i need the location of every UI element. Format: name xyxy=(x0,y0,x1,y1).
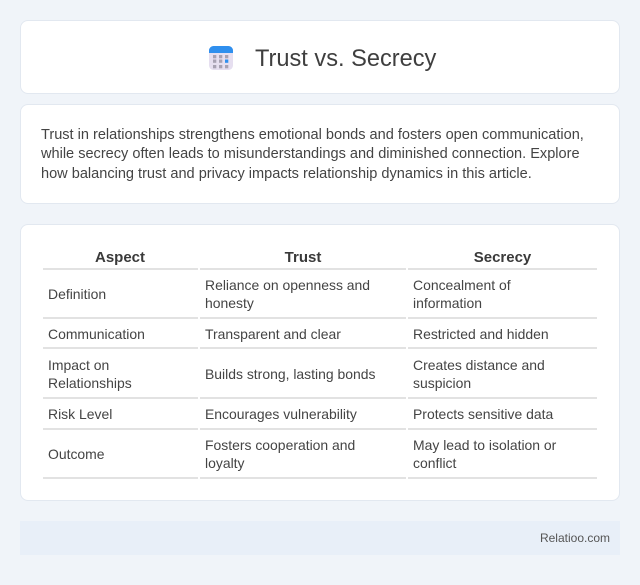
Definition: Trust: Reliance on openness and xyxy=(205,277,370,293)
Impact: Trust: Builds strong, lasting bonds xyxy=(205,366,375,382)
Risk: Secrecy: Protects sensitive data xyxy=(413,406,553,422)
intro paragraph xyxy=(41,126,584,182)
row: Definition: Definition xyxy=(48,286,106,302)
table header: Aspect: Aspect xyxy=(95,249,145,266)
Outcome: Trust: loyalty xyxy=(205,455,245,471)
panel: comparison table xyxy=(20,224,620,501)
Definition: Secrecy xyxy=(413,277,511,311)
Definition: Secrecy: information xyxy=(413,295,482,311)
Outcome: Trust: Fosters cooperation and xyxy=(205,437,355,453)
Impact: Secrecy: Creates distance and xyxy=(413,357,545,373)
Risk: Trust: Encourages vulnerability xyxy=(205,406,357,422)
row: Impact on Relationships: Relationships xyxy=(48,375,132,391)
Definition: Trust xyxy=(205,277,370,311)
Outcome: Trust xyxy=(205,437,355,471)
intro paragraph: Trust in relationships strengthens emotional bonds and fosters open communication, xyxy=(41,126,584,142)
panel: intro text xyxy=(20,104,620,204)
Definition: Trust: honesty xyxy=(205,295,254,311)
Outcome: Secrecy xyxy=(413,437,556,471)
title: Trust vs. Secrecy xyxy=(255,46,436,72)
Communication: Secrecy: Restricted and hidden xyxy=(413,326,549,342)
row: Risk Level: Risk Level xyxy=(48,406,112,422)
Outcome: Secrecy: May lead to isolation or xyxy=(413,437,556,453)
panel: title header xyxy=(20,20,620,94)
row: Outcome: Outcome xyxy=(48,446,105,462)
icon: calendar xyxy=(209,46,233,70)
table header: Trust: Trust xyxy=(285,249,321,266)
intro paragraph: while secrecy often leads to misunderstandings and diminished connection. Explore xyxy=(41,146,580,162)
Communication: Trust: Transparent and clear xyxy=(205,326,341,342)
Impact: Secrecy: suspicion xyxy=(413,375,471,391)
Outcome: Secrecy: conflict xyxy=(413,455,456,471)
intro paragraph: how balancing trust and privacy impacts relationship dynamics in this article. xyxy=(41,166,532,182)
row: Communication: Communication xyxy=(48,326,145,342)
row: Impact on Relationships: Impact on xyxy=(48,357,109,373)
table header: Secrecy: Secrecy xyxy=(474,249,531,266)
Definition: Secrecy: Concealment of xyxy=(413,277,511,293)
footer bar xyxy=(20,521,620,555)
row: Impact on Relationships xyxy=(48,357,132,391)
Impact: Secrecy xyxy=(413,357,545,391)
footer credit: Relatioo.com xyxy=(540,531,610,545)
